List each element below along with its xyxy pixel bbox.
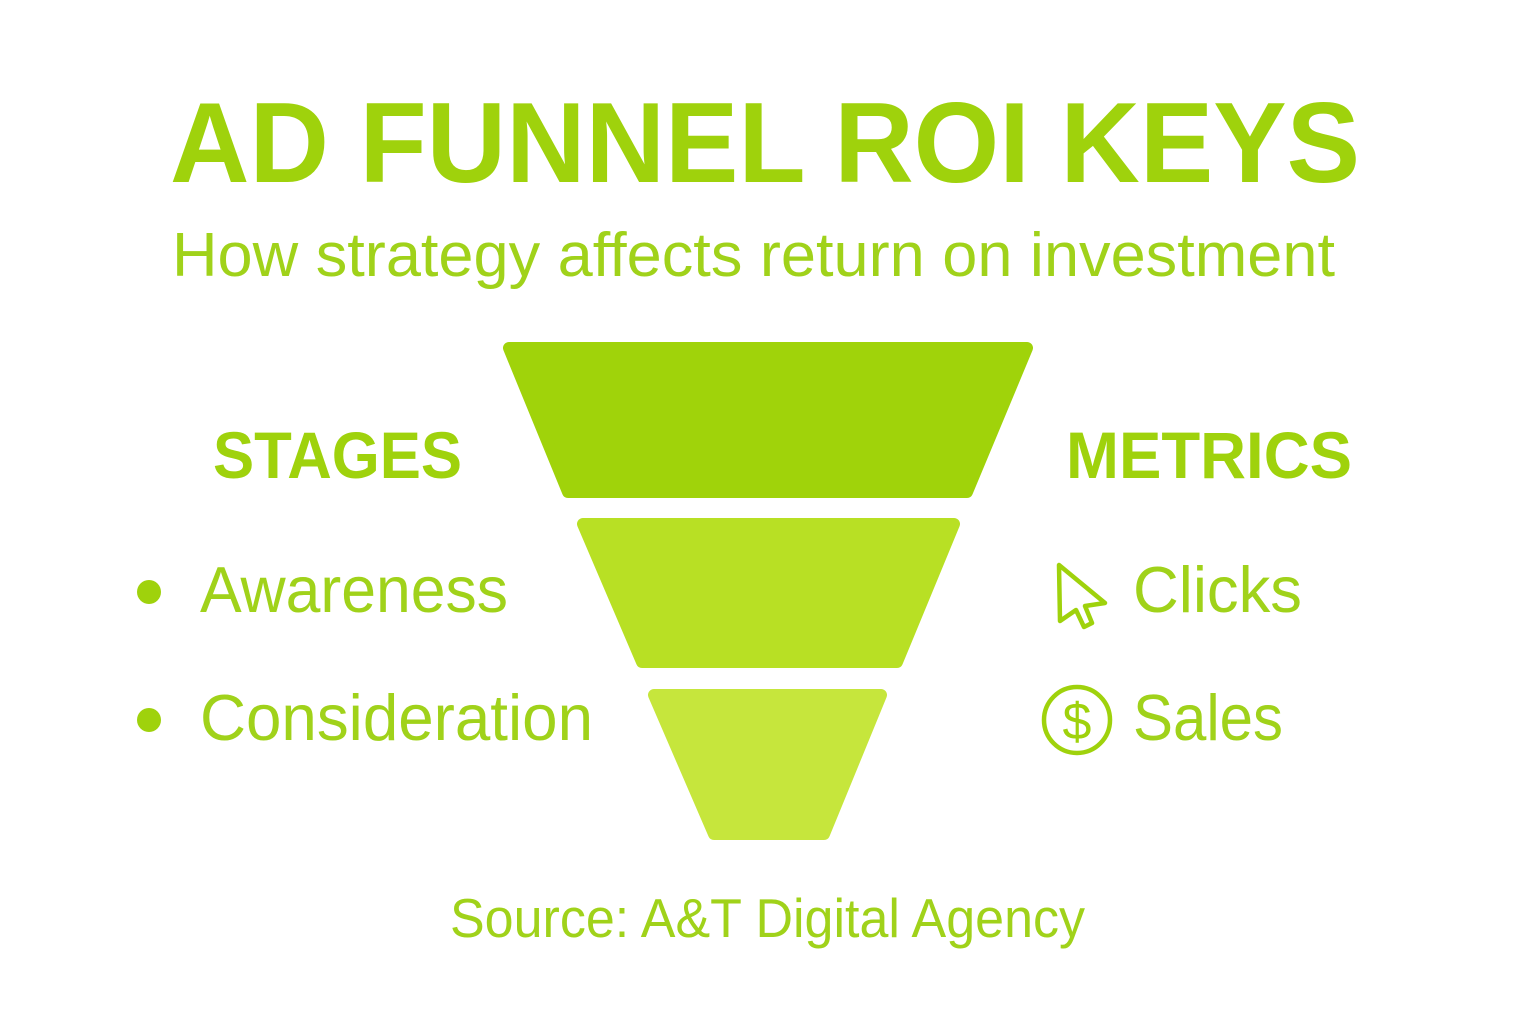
metric: sales with dollar icon <box>1044 681 1283 754</box>
metric: clicks with cursor icon <box>1059 553 1302 627</box>
stage item: awareness: Awareness <box>200 553 508 626</box>
funnel: top stage <box>509 348 1027 492</box>
heading: metrics: METRICS <box>1066 418 1352 492</box>
metric: sales with dollar icon: $ <box>1063 693 1092 751</box>
funnel: middle stage <box>583 524 954 662</box>
metric: clicks with cursor icon: Clicks <box>1133 553 1302 626</box>
metric: sales with dollar icon: Sales <box>1133 681 1283 754</box>
stage item: consideration: Consideration <box>200 681 593 754</box>
heading: stages: STAGES <box>213 418 462 492</box>
funnel: bottom stage <box>654 695 881 834</box>
subtitle: How strategy affects return on investment <box>172 221 1335 290</box>
funnel <box>509 348 1027 834</box>
title: AD FUNNEL ROI KEYS <box>170 80 1360 207</box>
source footer: Source: A&T Digital Agency <box>450 887 1085 949</box>
